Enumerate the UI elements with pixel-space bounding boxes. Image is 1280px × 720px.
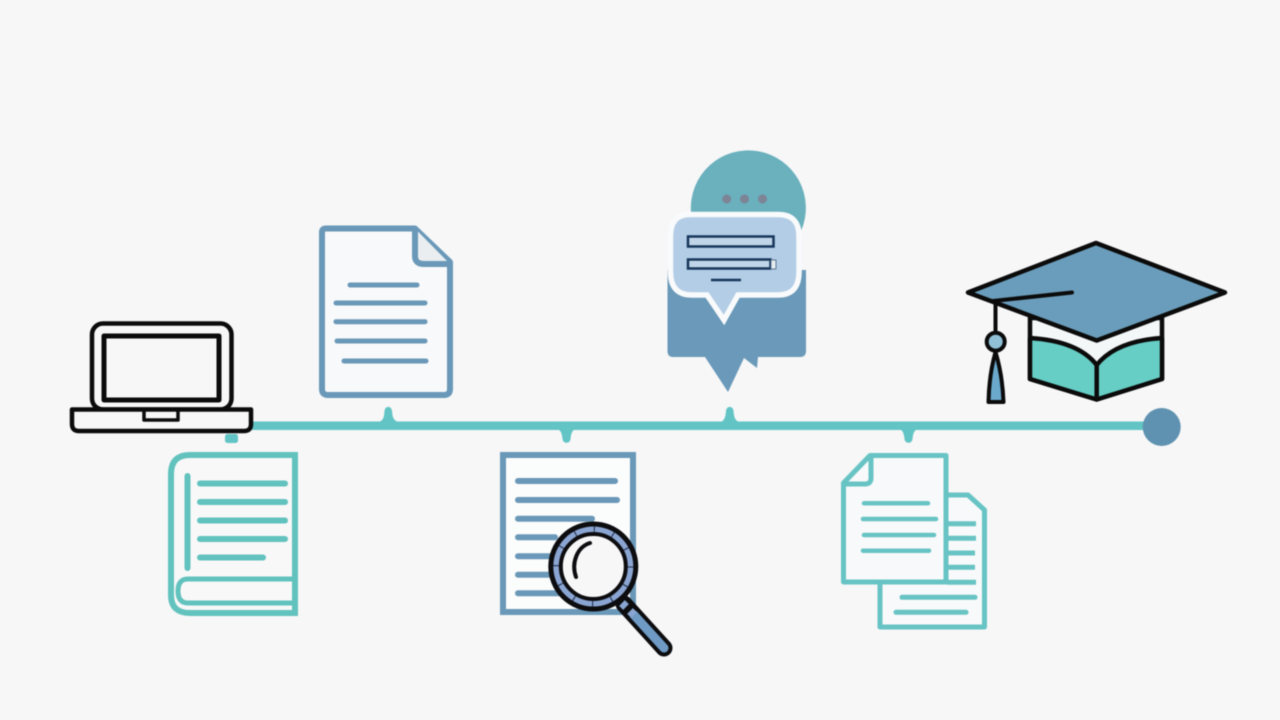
book pages xyxy=(178,579,295,603)
bubble dots xyxy=(722,194,767,204)
lower blue bubble xyxy=(668,270,806,392)
icon: document under magnifying glass xyxy=(503,455,633,612)
front light bubble xyxy=(670,214,799,320)
cap base with open book xyxy=(1030,318,1162,400)
magnifier ring xyxy=(551,524,636,609)
magnifier ring segments xyxy=(556,530,630,604)
back page xyxy=(880,495,984,627)
magnifier handle xyxy=(624,604,664,648)
icon: speech bubbles xyxy=(668,150,806,392)
magnifier lens xyxy=(561,534,626,599)
icon: document xyxy=(322,228,450,395)
icon: overlapping documents xyxy=(844,456,984,627)
tassel knob xyxy=(987,333,1005,351)
icon: magnifying glass xyxy=(551,524,664,648)
back round bubble xyxy=(691,150,806,231)
timeline line with ticks xyxy=(225,407,1150,443)
page text lines xyxy=(518,481,617,593)
book text lines xyxy=(188,476,285,568)
front page text lines xyxy=(863,503,936,551)
book cover xyxy=(171,455,295,613)
icon: book xyxy=(171,455,295,613)
bubble text bars xyxy=(688,236,776,280)
tassel cord xyxy=(993,292,1072,333)
document fold xyxy=(415,228,450,264)
document text lines xyxy=(336,285,426,361)
icon: laptop xyxy=(72,324,251,431)
mortarboard xyxy=(968,243,1225,340)
page outline xyxy=(503,455,633,612)
back page text lines xyxy=(896,524,976,612)
magnifier collar xyxy=(622,603,634,615)
front page fold xyxy=(844,456,871,484)
magnifier highlight xyxy=(574,543,590,577)
icon: graduation cap xyxy=(968,243,1225,402)
timeline end marker xyxy=(1143,408,1181,446)
document outline xyxy=(322,228,450,395)
tassel xyxy=(988,352,1004,402)
front page xyxy=(844,456,946,582)
